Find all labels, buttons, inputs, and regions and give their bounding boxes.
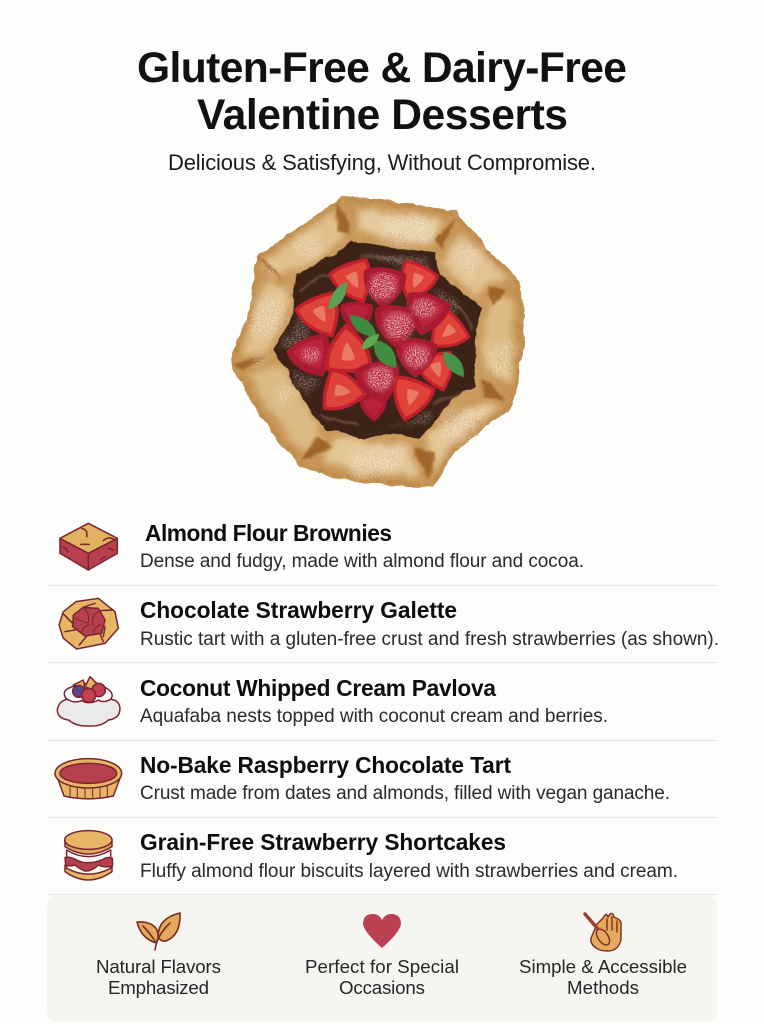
dessert row: almond flour brownies bbox=[140, 520, 584, 572]
panel: benefits bbox=[47, 896, 717, 1021]
benefit: simple methods: Methods bbox=[567, 977, 639, 998]
icon: hand with whisk bbox=[585, 913, 621, 951]
panel: dessert list bbox=[140, 520, 719, 882]
benefit: special occasions bbox=[305, 914, 459, 998]
label: Natural Flavors bbox=[96, 956, 221, 977]
benefit: natural flavors bbox=[96, 913, 221, 998]
dessert row: no-bake raspberry chocolate tart bbox=[140, 752, 670, 804]
icon: tart bbox=[55, 759, 122, 799]
icon: brownie bbox=[60, 523, 117, 570]
description: Crust made from dates and almonds, filled with vegan ganache. bbox=[140, 783, 670, 804]
label: Perfect for Special bbox=[305, 956, 459, 977]
description: Aquafaba nests topped with coconut cream and berries. bbox=[140, 706, 608, 727]
description: Dense and fudgy, made with almond flour and cocoa. bbox=[140, 551, 584, 572]
photo: chocolate strawberry galette bbox=[233, 199, 522, 485]
heading: Chocolate Strawberry Galette bbox=[140, 597, 457, 623]
mint leaves bbox=[328, 282, 464, 377]
icon: pavlova bbox=[57, 677, 120, 726]
benefit: special occasions: Occasions bbox=[339, 977, 425, 998]
dessert row: grain-free strawberry shortcakes bbox=[140, 829, 678, 882]
description: Rustic tart with a gluten-free crust and fresh strawberries (as shown). bbox=[140, 629, 719, 650]
dessert row: chocolate strawberry galette bbox=[140, 597, 719, 650]
powdered sugar bbox=[301, 273, 437, 390]
icon: shortcake bbox=[65, 831, 113, 880]
icon: heart bbox=[363, 914, 401, 948]
heading: Coconut Whipped Cream Pavlova bbox=[140, 675, 496, 701]
chocolate filling bbox=[273, 240, 480, 440]
icons column bbox=[55, 523, 122, 880]
dessert row: coconut whipped cream pavlova bbox=[140, 675, 608, 727]
title bbox=[137, 44, 627, 139]
heading: Almond Flour Brownies bbox=[145, 520, 392, 546]
icon: leaves bbox=[137, 913, 180, 950]
benefit: natural flavors: Emphasized bbox=[108, 977, 209, 998]
fold shadows bbox=[233, 202, 508, 477]
icon: galette bbox=[59, 598, 118, 649]
benefit: simple methods bbox=[519, 913, 687, 998]
title: Gluten-Free & Dairy-Free bbox=[137, 44, 627, 92]
strawberries bbox=[284, 255, 473, 428]
heading: No-Bake Raspberry Chocolate Tart bbox=[140, 752, 511, 778]
heading: Grain-Free Strawberry Shortcakes bbox=[140, 829, 506, 855]
subtitle: Delicious & Satisfying, Without Compromise. bbox=[168, 150, 596, 175]
description: Fluffy almond flour biscuits layered with strawberries and cream. bbox=[140, 861, 678, 882]
crust bbox=[233, 199, 522, 485]
title: Valentine Desserts bbox=[197, 91, 568, 139]
label: Simple & Accessible bbox=[519, 956, 687, 977]
